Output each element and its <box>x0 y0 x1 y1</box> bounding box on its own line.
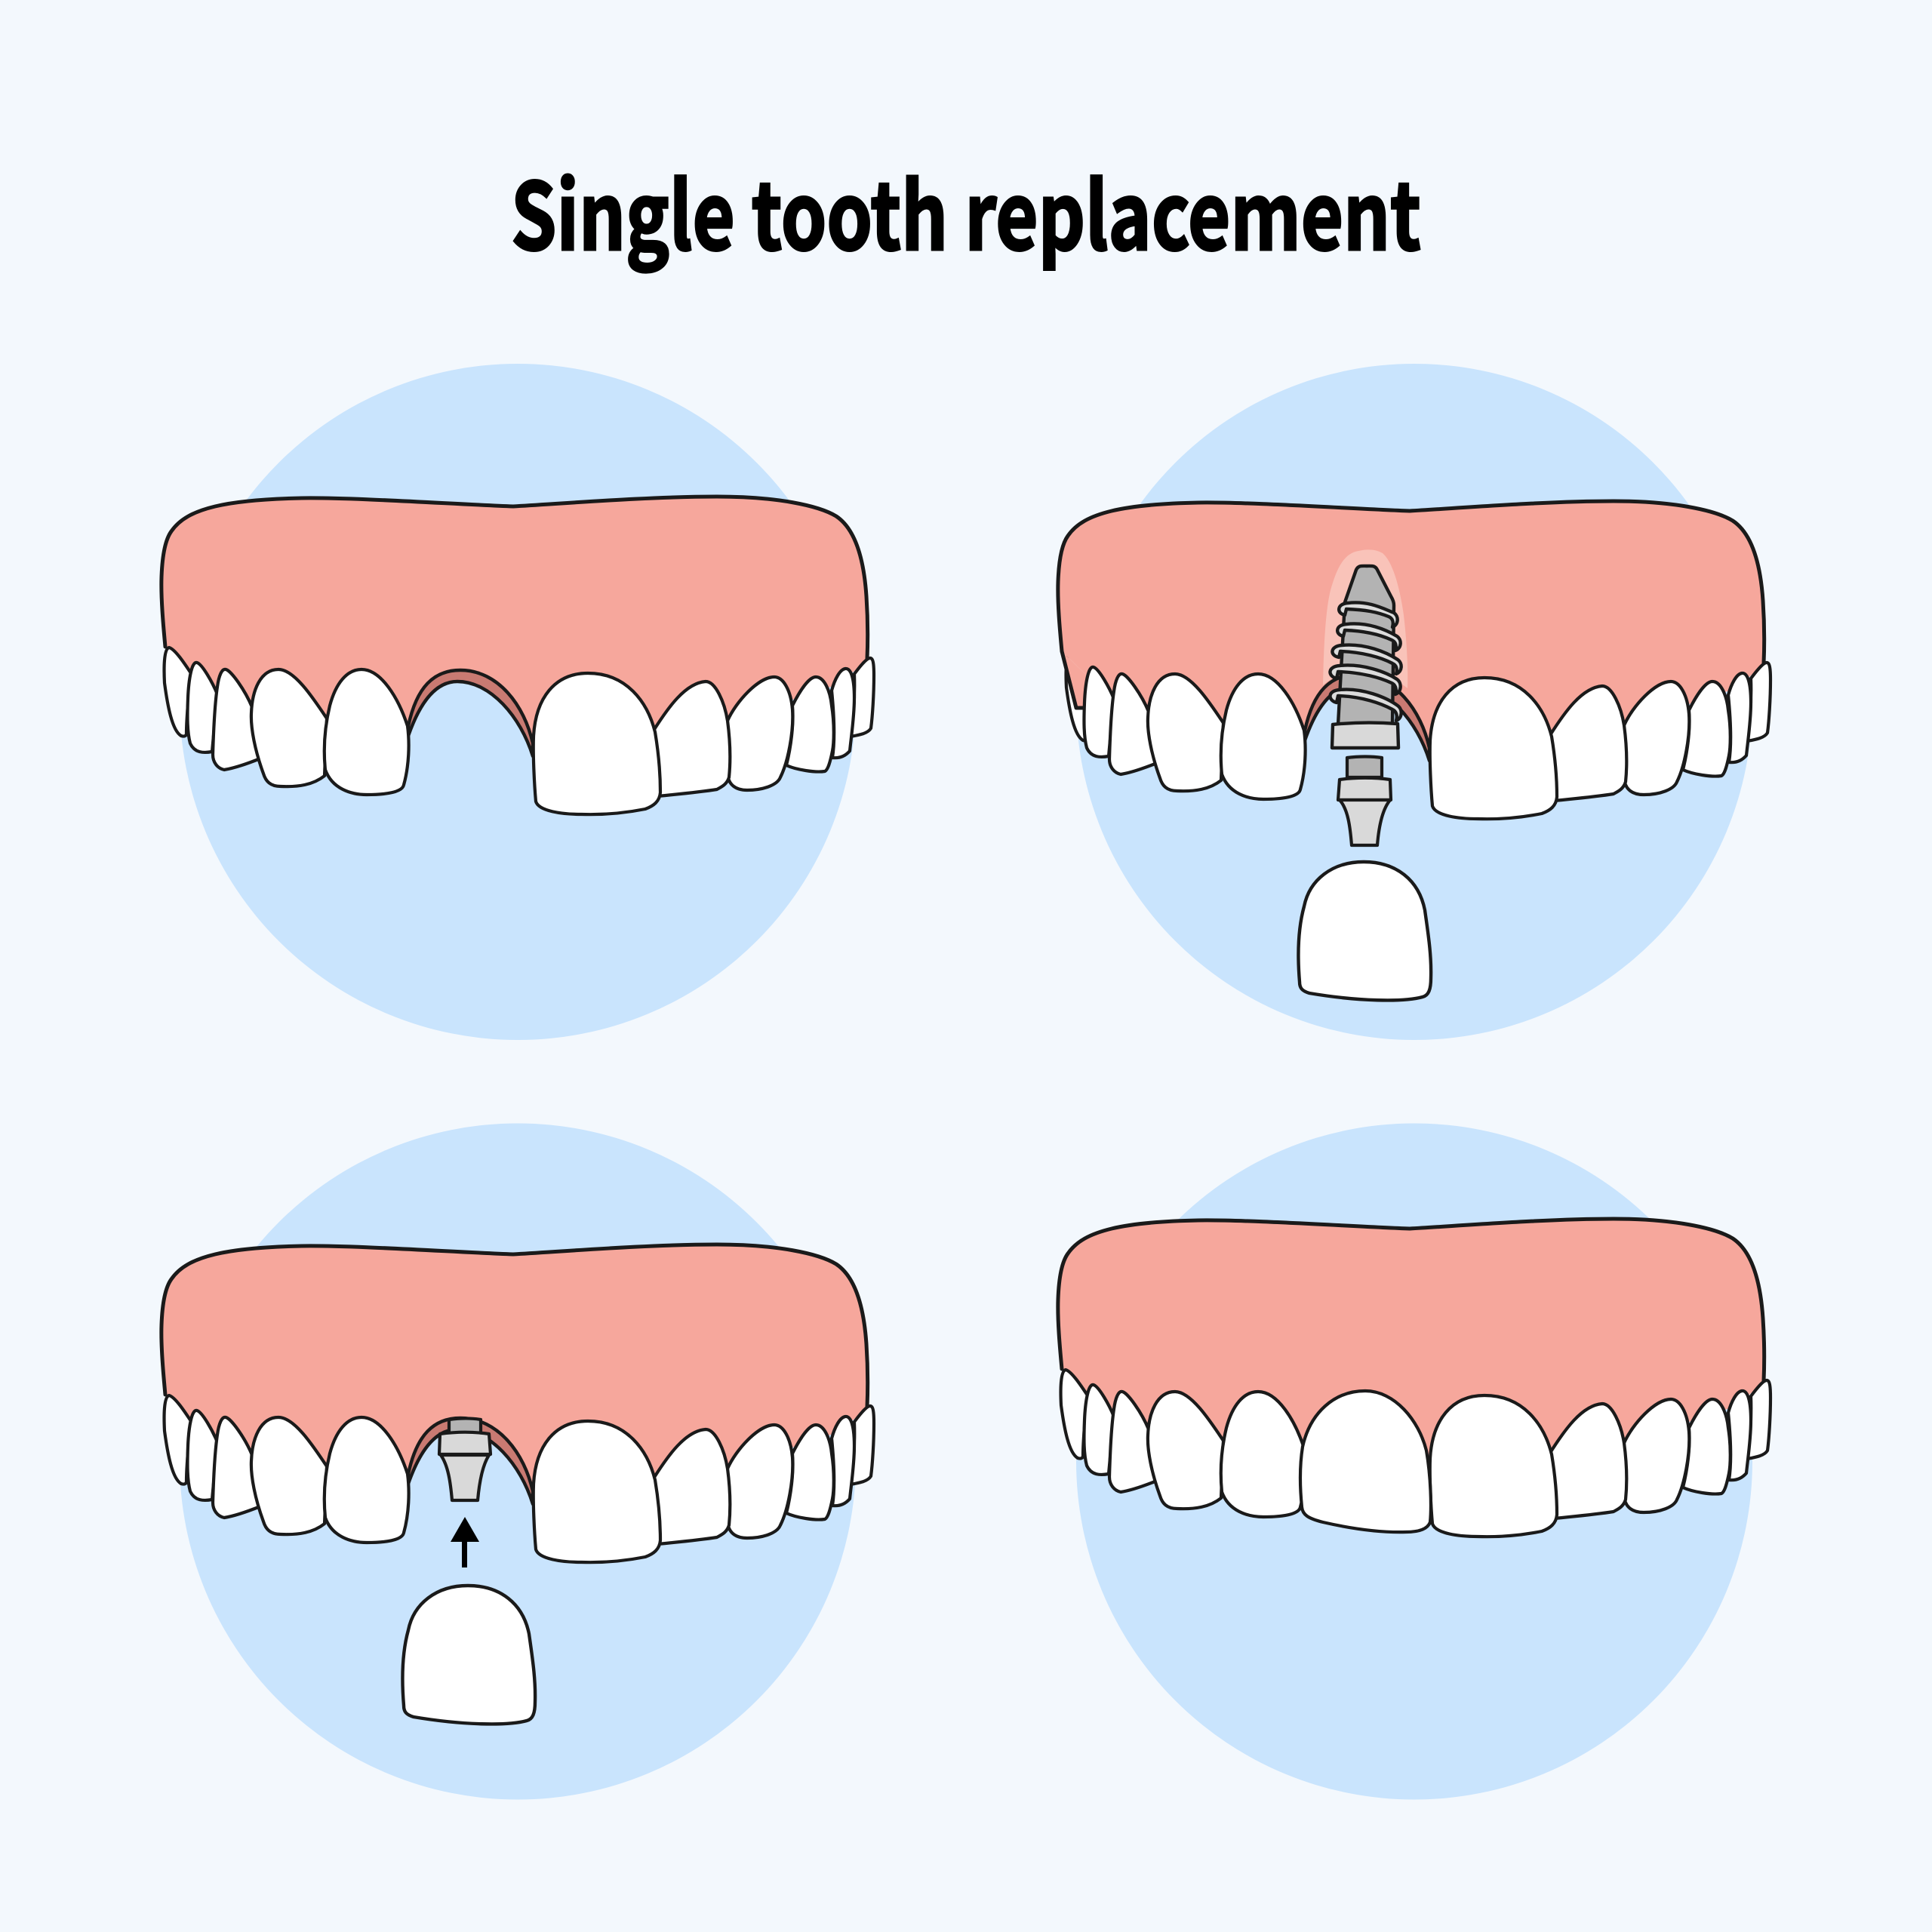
teeth <box>1084 663 1770 819</box>
screw collar <box>1332 723 1398 748</box>
gum fill <box>1062 651 1113 708</box>
gum and full teeth <box>1058 1219 1770 1537</box>
gum top line <box>162 1244 868 1407</box>
panel: implant parts exploded <box>1058 364 1770 1040</box>
gum outline <box>1062 651 1087 708</box>
gum <box>162 497 868 743</box>
gum and teeth <box>162 1244 874 1562</box>
abutment <box>439 1419 491 1500</box>
teeth <box>165 648 874 814</box>
gum <box>1058 501 1764 748</box>
panel: missing tooth <box>162 364 874 1040</box>
arrow up <box>451 1517 479 1567</box>
abutment <box>1338 756 1391 845</box>
teeth <box>1061 1370 1770 1537</box>
exposed gum socket <box>408 1418 533 1504</box>
crown <box>1298 862 1431 1000</box>
crown <box>402 1586 535 1724</box>
gum fill <box>1058 1219 1764 1469</box>
screw threads <box>1330 602 1401 721</box>
gum fill <box>162 1244 868 1491</box>
gum and teeth <box>1058 501 1770 819</box>
exposed gum socket <box>1305 675 1429 761</box>
implant screw <box>1330 566 1401 748</box>
teeth <box>165 1395 874 1562</box>
screw body <box>1338 566 1394 724</box>
exposed gum socket <box>408 670 533 756</box>
implant socket halo <box>1323 549 1407 688</box>
tucked back tooth <box>1066 652 1093 741</box>
blue circle <box>1076 1123 1752 1799</box>
gum top line <box>1058 1219 1764 1381</box>
blue circle <box>180 1123 856 1799</box>
blue circle <box>180 364 856 1040</box>
panel: completed restoration <box>1058 1123 1770 1799</box>
title: Single tooth replacement <box>511 143 1421 277</box>
gum top line <box>1058 501 1764 663</box>
panel: abutment placed <box>162 1123 874 1799</box>
blue circle <box>1076 364 1752 1040</box>
